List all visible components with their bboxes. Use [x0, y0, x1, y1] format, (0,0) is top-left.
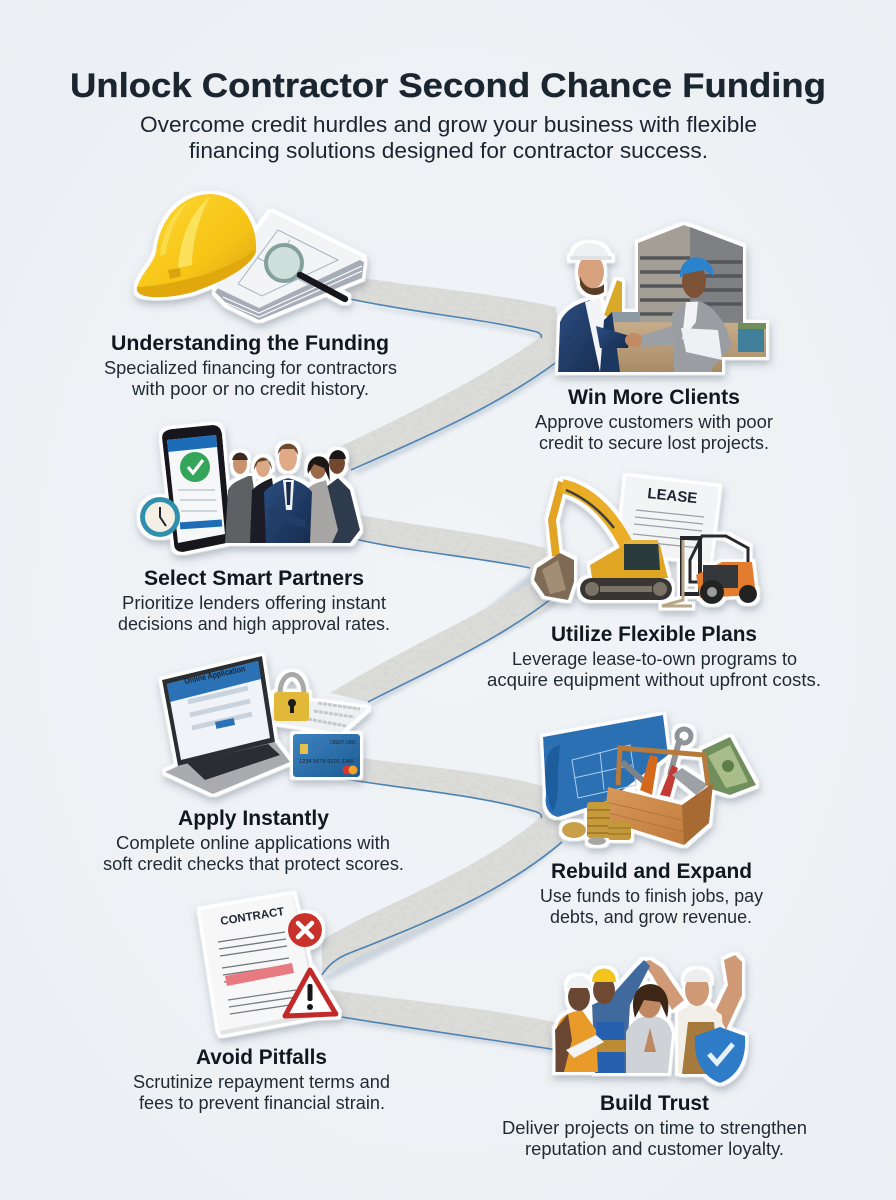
step: Select Smart Partners: decisions and high approval rates. [118, 614, 390, 634]
step: Avoid Pitfalls: Avoid Pitfalls [196, 1045, 327, 1069]
icon: hard hat and blueprints with magnifier [137, 194, 364, 320]
step: Build Trust: reputation and customer loyalty. [525, 1139, 784, 1159]
icon: laptop, padlock, keyboard and credit card [162, 656, 368, 794]
step: Utilize Flexible Plans: Leverage lease-to-own programs to [512, 649, 797, 669]
step: Understanding the Funding: with poor or no credit history. [131, 379, 369, 399]
step: Apply Instantly [103, 806, 404, 874]
step: Utilize Flexible Plans [487, 622, 821, 690]
step: Rebuild and Expand [540, 859, 763, 927]
step: Rebuild and Expand: debts, and grow revenue. [550, 907, 752, 927]
step: Build Trust [502, 1091, 807, 1159]
step: Select Smart Partners [118, 566, 390, 634]
step: Win More Clients [535, 385, 773, 453]
winding concrete road [322, 275, 562, 1054]
subtitle: financing solutions designed for contractor success. [189, 138, 708, 163]
step: Avoid Pitfalls: fees to prevent financial strain. [139, 1093, 385, 1113]
step: Win More Clients: credit to secure lost projects. [539, 433, 769, 453]
icon: phone approval with team [140, 425, 360, 552]
step: Avoid Pitfalls: Scrutinize repayment terms and [133, 1072, 390, 1092]
step: Rebuild and Expand: Use funds to finish jobs, pay [540, 886, 763, 906]
icon: excavator, lease and forklift [534, 476, 757, 606]
icon: contract with warnings [200, 894, 336, 1035]
icon: contract with warnings: CONTRACT [220, 906, 285, 928]
title: Unlock Contractor Second Chance Funding [70, 67, 826, 105]
step: Rebuild and Expand: Rebuild and Expand [551, 859, 752, 883]
icon: laptop, padlock, keyboard and credit card: Online Application [183, 663, 246, 686]
subtitle [140, 112, 757, 163]
icon: celebrating workers with shield [555, 955, 745, 1083]
step: Utilize Flexible Plans: Utilize Flexible Plans [551, 622, 757, 646]
step: Apply Instantly: soft credit checks that protect scores. [103, 854, 404, 874]
step: Select Smart Partners: Select Smart Partners [144, 566, 364, 590]
step: Build Trust: Deliver projects on time to strengthen [502, 1118, 807, 1138]
step: Understanding the Funding [104, 331, 397, 399]
step: Build Trust: Build Trust [600, 1091, 709, 1115]
step: Understanding the Funding: Understanding the Funding [111, 331, 389, 355]
step: Avoid Pitfalls [133, 1045, 390, 1113]
step: Apply Instantly: Apply Instantly [178, 806, 329, 830]
step: Understanding the Funding: Specialized financing for contractors [104, 358, 397, 378]
step: Win More Clients: Win More Clients [568, 385, 740, 409]
step: Apply Instantly: Complete online applications with [116, 833, 390, 853]
step: Select Smart Partners: Prioritize lenders offering instant [122, 593, 386, 613]
icon: laptop, padlock, keyboard and credit card: CREDIT CARD [330, 740, 356, 746]
icon: client handshake at construction site [558, 225, 766, 372]
icon: toolbox with blueprint, coins and cash [543, 715, 756, 845]
step: Utilize Flexible Plans: acquire equipment without upfront costs. [487, 670, 821, 690]
icon: excavator, lease and forklift: LEASE [647, 485, 698, 507]
subtitle: Overcome credit hurdles and grow your business with flexible [140, 112, 757, 137]
icon: laptop, padlock, keyboard and credit card: 1234 5678 9101 2345 [299, 759, 354, 765]
step: Win More Clients: Approve customers with poor [535, 412, 773, 432]
